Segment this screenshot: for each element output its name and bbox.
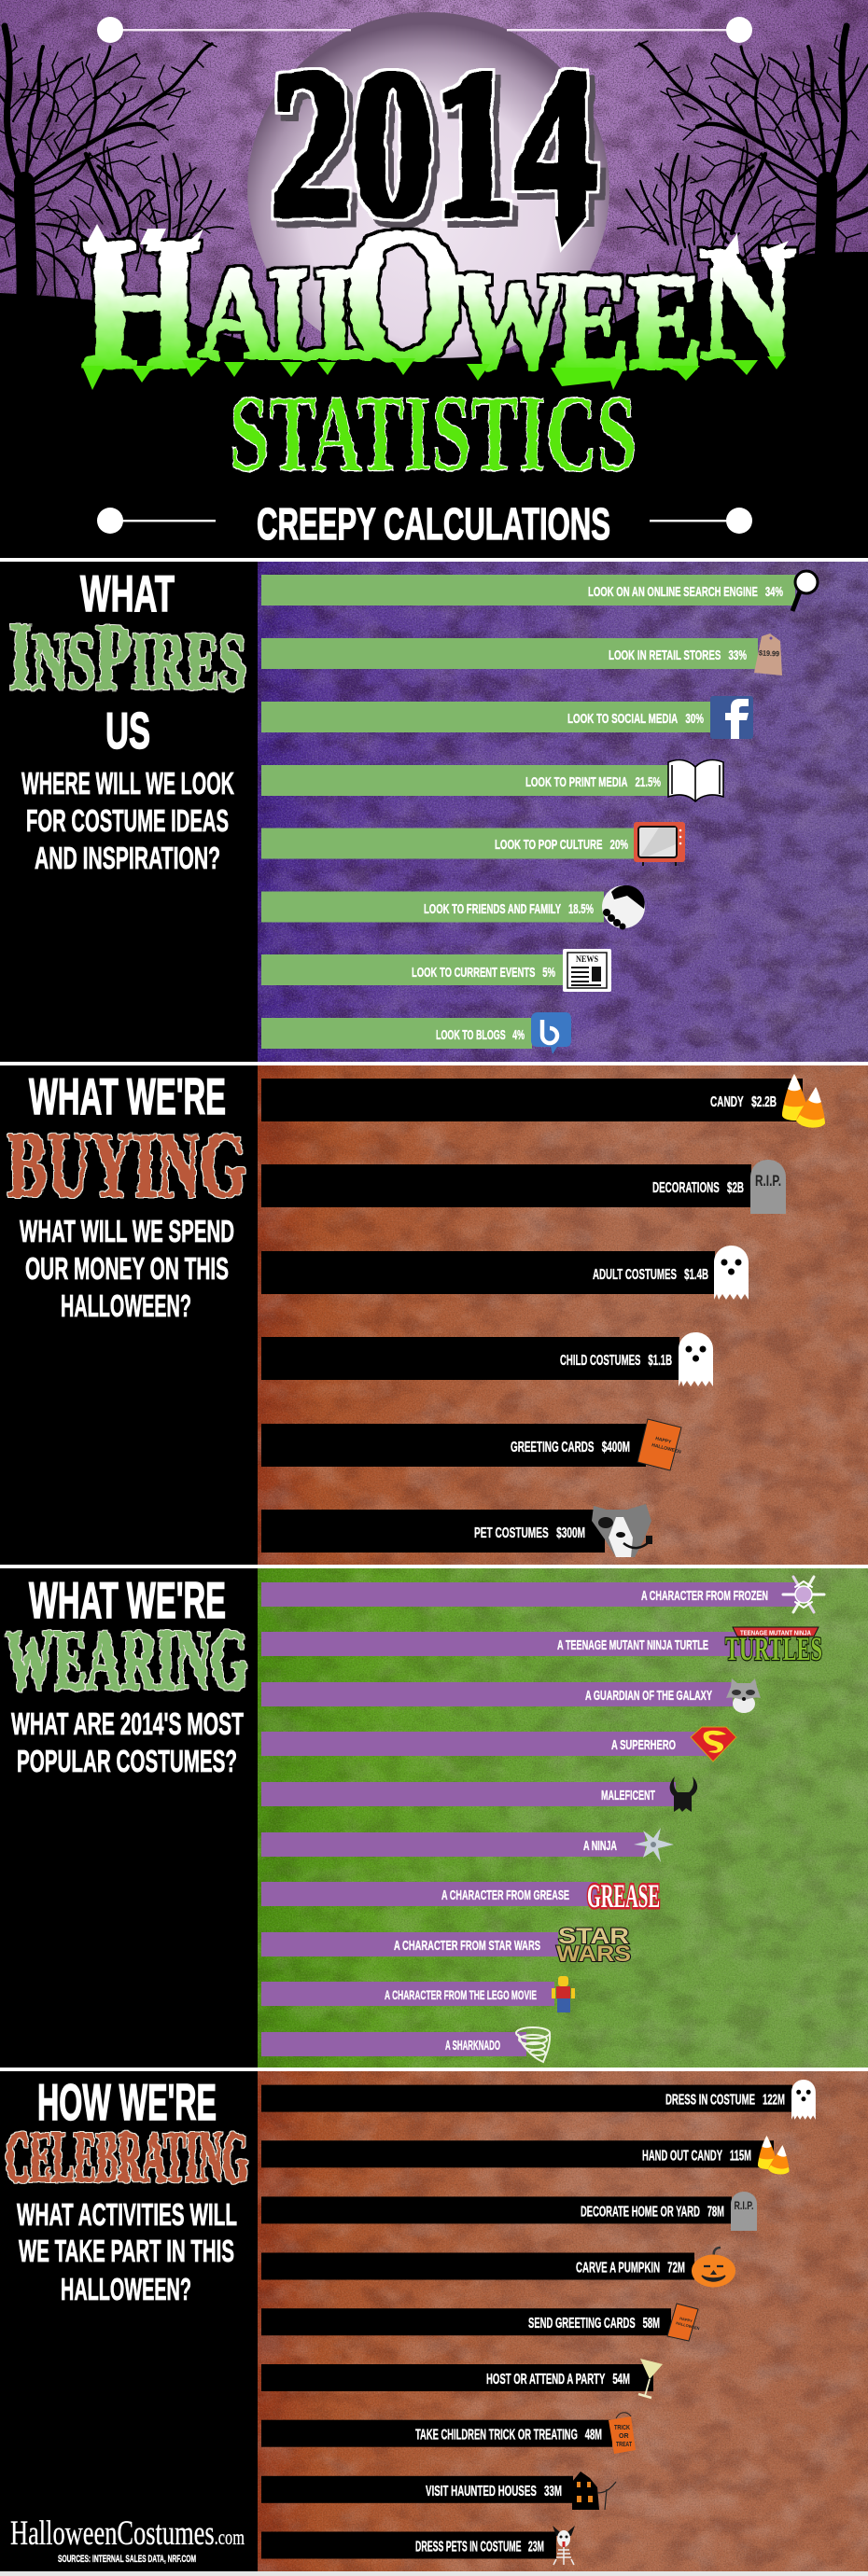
bar: dress in costume: DRESS IN COSTUME 122M xyxy=(665,2093,785,2109)
bar: retail stores xyxy=(261,634,782,675)
icon: martini glass xyxy=(638,2359,663,2398)
bar: haunted houses: VISIT HAUNTED HOUSES 33M xyxy=(426,2484,562,2499)
panel: how we're celebrating xyxy=(6,2071,868,2571)
icon: greeting card: HALLOWEEN xyxy=(676,2320,700,2331)
panel: how we're celebrating: CELEBRATING xyxy=(6,2116,248,2197)
icon: tombstone: R.I.P. xyxy=(734,2199,754,2212)
bar: child costumes: CHILD COSTUMES $1.1B xyxy=(560,1353,672,1369)
icon: maleficent horns xyxy=(670,1776,697,1812)
question text xyxy=(17,2197,237,2306)
bar: dress pets: DRESS PETS IN COSTUME 23M xyxy=(415,2540,544,2555)
divider xyxy=(0,2068,868,2071)
bar: blogs xyxy=(261,1012,571,1054)
icon: greeting card xyxy=(667,2304,700,2341)
heading accent: inspires: INSPIRES xyxy=(9,603,246,710)
grass tufts xyxy=(211,233,726,364)
question text: WHAT WILL WE SPEND xyxy=(20,1214,234,1248)
bar: pet costumes xyxy=(261,1504,652,1557)
bar: star wars: A CHARACTER FROM STAR WARS xyxy=(394,1939,540,1954)
icon: open book xyxy=(668,760,723,801)
bar: frozen xyxy=(261,1577,824,1612)
question text: HALLOWEEN? xyxy=(61,2272,191,2306)
divider xyxy=(0,1565,868,1568)
bottom border xyxy=(0,2571,868,2576)
white spikes on letters xyxy=(86,224,789,271)
bar: trick or treating xyxy=(261,2413,636,2454)
heading: WHAT WE'RE xyxy=(29,1571,226,1629)
bar: ninja xyxy=(261,1828,674,1862)
header: title area xyxy=(0,0,868,558)
purple textured background xyxy=(258,562,868,1062)
bar: decorations: DECORATIONS $2B xyxy=(652,1180,744,1196)
icon: trick or treat bag xyxy=(609,2413,636,2454)
bar: current events: LOOK TO CURRENT EVENTS 5% xyxy=(412,966,555,981)
bar: carve a pumpkin: CARVE A PUMPKIN 72M xyxy=(576,2260,685,2277)
title: 2014: 2014 xyxy=(271,26,596,261)
bar: haunted houses xyxy=(261,2472,616,2510)
bar: grease: A CHARACTER FROM GREASE xyxy=(441,1888,569,1903)
icon: blog bubble xyxy=(531,1012,571,1054)
bar: host a party xyxy=(261,2359,663,2398)
bar: greeting cards: GREETING CARDS $400M xyxy=(511,1440,630,1455)
bar: sharknado xyxy=(261,2027,550,2062)
bar: hand out candy: HAND OUT CANDY 115M xyxy=(642,2148,751,2164)
title: Halloween: ALL xyxy=(198,241,386,388)
bar: friends and family: LOOK TO FRIENDS AND FAMILY 18.5% xyxy=(424,902,594,917)
bar: maleficent xyxy=(261,1776,697,1812)
bar: guardians xyxy=(261,1678,761,1713)
divider xyxy=(0,1062,868,1065)
heading: HOW WE'RE xyxy=(37,2073,217,2131)
logo: HalloweenCostumes.com: HalloweenCostumes.com xyxy=(10,2514,245,2553)
icon: trick or treat bag: OR xyxy=(619,2433,629,2440)
icon: lego figure xyxy=(552,1976,575,2012)
title: Halloween: WEE xyxy=(455,245,703,397)
icon: greeting card: HAPPY xyxy=(679,2316,693,2323)
heading accent: buying: BUYING xyxy=(7,1113,246,1217)
question text: FOR COSTUME IDEAS xyxy=(26,803,229,838)
question text xyxy=(11,1706,244,1778)
question text: AND INSPIRATION? xyxy=(35,841,220,875)
divider xyxy=(0,558,868,562)
panel: what we're wearing xyxy=(6,1568,868,2068)
bar: child costumes xyxy=(261,1332,713,1386)
title: Halloween xyxy=(82,187,795,410)
icon: tombstone xyxy=(731,2192,757,2231)
ground silhouette xyxy=(0,252,868,558)
question text: WHERE WILL WE LOOK xyxy=(21,766,234,801)
icon: star wars logo: WARS xyxy=(556,1942,631,1967)
icon: star wars logo: STAR xyxy=(558,1924,629,1949)
bar: send greeting cards: SEND GREETING CARDS 58M xyxy=(528,2316,660,2332)
bar: decorate home xyxy=(261,2192,757,2231)
title: statistics: STATISTICS xyxy=(230,372,637,494)
bar: search engine xyxy=(261,571,818,611)
bar: carve a pumpkin xyxy=(261,2248,735,2288)
icon: candy corn xyxy=(782,1074,825,1128)
bar: grease xyxy=(261,1877,660,1915)
title: Halloween: H xyxy=(82,199,202,410)
icon: newspaper xyxy=(563,949,611,992)
rust textured background xyxy=(258,1065,868,1565)
question text: OUR MONEY ON THIS xyxy=(25,1251,229,1286)
icon: ghost xyxy=(791,2080,816,2120)
bar: candy: CANDY $2.2B xyxy=(710,1094,777,1110)
question text: WHAT ACTIVITIES WILL xyxy=(17,2197,237,2232)
icon: ghost xyxy=(714,1246,749,1300)
subtitle: creepy calculations: CREEPY CALCULATIONS xyxy=(257,500,610,550)
question text xyxy=(20,1214,234,1323)
icon: shuriken xyxy=(634,1828,674,1862)
icon: skeleton pet xyxy=(553,2526,575,2565)
slime drips xyxy=(82,356,786,390)
bar: decorations xyxy=(261,1160,786,1214)
bar: star wars xyxy=(261,1924,631,1967)
icon: television xyxy=(634,822,685,866)
icon: superman shield xyxy=(691,1727,736,1761)
question text: HALLOWEEN? xyxy=(61,1288,191,1323)
bar: frozen: A CHARACTER FROM FROZEN xyxy=(641,1589,768,1604)
icon: bulldog with pipe xyxy=(592,1504,652,1557)
bar: sharknado: A SHARKNADO xyxy=(445,2039,500,2054)
bar: current events xyxy=(261,949,611,992)
icon: pumpkin xyxy=(692,2248,735,2288)
heading: WHAT WE'RE xyxy=(29,1067,226,1125)
bar: ninja turtle xyxy=(261,1627,822,1667)
tail of the four xyxy=(555,216,586,250)
bar: blogs: LOOK TO BLOGS 4% xyxy=(436,1028,525,1043)
icon: turtles logo xyxy=(725,1627,822,1667)
bar: lego movie: A CHARACTER FROM THE LEGO MOVIE xyxy=(385,1987,537,2002)
bar: hand out candy xyxy=(261,2136,790,2174)
icon: trick or treat bag: TRICK xyxy=(614,2425,630,2431)
bar: dress pets xyxy=(261,2526,575,2565)
bar: superhero: A SUPERHERO xyxy=(611,1738,676,1753)
bar: trick or treating: TAKE CHILDREN TRICK OR TREATING 48M xyxy=(415,2428,602,2444)
sources: SOURCES: INTERNAL SALES DATA, NRF.COM xyxy=(58,2554,196,2565)
bar: send greeting cards xyxy=(261,2304,700,2341)
icon: star wars logo xyxy=(556,1924,631,1967)
bar: adult costumes: ADULT COSTUMES $1.4B xyxy=(593,1267,708,1283)
icon: grease logo: GREASE xyxy=(587,1877,660,1915)
bar: greeting cards xyxy=(261,1419,682,1470)
bar: lego movie xyxy=(261,1976,575,2012)
icon: handshake xyxy=(602,885,645,929)
bottom decorative line with dots xyxy=(97,508,752,534)
heading accent: wearing: WEARING xyxy=(6,1612,248,1707)
panel: what we're buying xyxy=(7,1065,868,1565)
bar: pop culture: LOOK TO POP CULTURE 20% xyxy=(495,838,628,853)
icon: price tag xyxy=(754,634,782,675)
night sky background xyxy=(0,0,868,558)
icon: facebook xyxy=(710,696,753,739)
bar: print media xyxy=(261,760,723,801)
icon: tombstone: R.I.P. xyxy=(755,1172,781,1190)
question text xyxy=(21,766,234,875)
heading: WHAT xyxy=(80,564,175,622)
question text: POPULAR COSTUMES? xyxy=(17,1744,237,1778)
icon: magnifying glass xyxy=(792,571,818,611)
bar: candy xyxy=(261,1074,825,1128)
bar: retail stores: LOOK IN RETAIL STORES 33% xyxy=(609,648,747,663)
icon: ghost xyxy=(679,1332,713,1386)
bar: guardians: A GUARDIAN OF THE GALAXY xyxy=(585,1689,712,1704)
bar: ninja: A NINJA xyxy=(583,1839,617,1854)
title: Halloween: O xyxy=(343,187,464,402)
icon: turtles logo: TEENAGE MUTANT NINJA xyxy=(740,1629,811,1636)
bar: decorate home: DECORATE HOME OR YARD 78M xyxy=(581,2204,724,2220)
icon: price tag: $19.99 xyxy=(759,648,780,659)
question text: WHAT ARE 2014'S MOST xyxy=(11,1706,244,1741)
bar: host a party: HOST OR ATTEND A PARTY 54M xyxy=(486,2372,630,2388)
icon: bare trees right xyxy=(618,26,868,313)
bar: adult costumes xyxy=(261,1246,749,1300)
icon: haunted house xyxy=(572,2472,616,2510)
bar: print media: LOOK TO PRINT MEDIA 21.5% xyxy=(525,775,661,790)
icon: greeting card xyxy=(637,1419,682,1470)
green textured background xyxy=(258,1568,868,2068)
panel: what inspires us xyxy=(9,562,868,1062)
icon: newspaper: NEWS xyxy=(576,954,598,964)
moon xyxy=(247,12,609,367)
rust textured background xyxy=(258,2071,868,2571)
question text: WE TAKE PART IN THIS xyxy=(19,2234,234,2268)
icon: trick or treat bag: TREAT xyxy=(616,2442,633,2448)
icon: snowflake xyxy=(783,1577,824,1612)
bar: pop culture xyxy=(261,822,685,866)
bar: dress in costume xyxy=(261,2080,816,2120)
top decorative line with dots xyxy=(97,17,752,43)
bar: social media xyxy=(261,696,753,739)
bar: social media: LOOK TO SOCIAL MEDIA 30% xyxy=(567,712,704,727)
icon: raccoon xyxy=(726,1678,761,1713)
icon: greeting card: HAPPY xyxy=(655,1436,672,1445)
bar: ninja turtle: A TEENAGE MUTANT NINJA TURTLE xyxy=(557,1638,708,1653)
bar: superhero xyxy=(261,1727,736,1761)
title: Halloween: N xyxy=(699,210,795,395)
bar: maleficent: MALEFICENT xyxy=(601,1789,655,1803)
icon: tombstone xyxy=(750,1160,786,1214)
icon: candy corn xyxy=(758,2136,790,2174)
bar: pet costumes: PET COSTUMES $300M xyxy=(474,1525,585,1541)
icon: bare trees left xyxy=(0,26,233,313)
icon: tornado xyxy=(516,2027,550,2062)
bar: friends and family xyxy=(261,885,645,929)
icon: greeting card: HALLOWEEN xyxy=(651,1442,682,1455)
heading: US xyxy=(105,702,150,759)
